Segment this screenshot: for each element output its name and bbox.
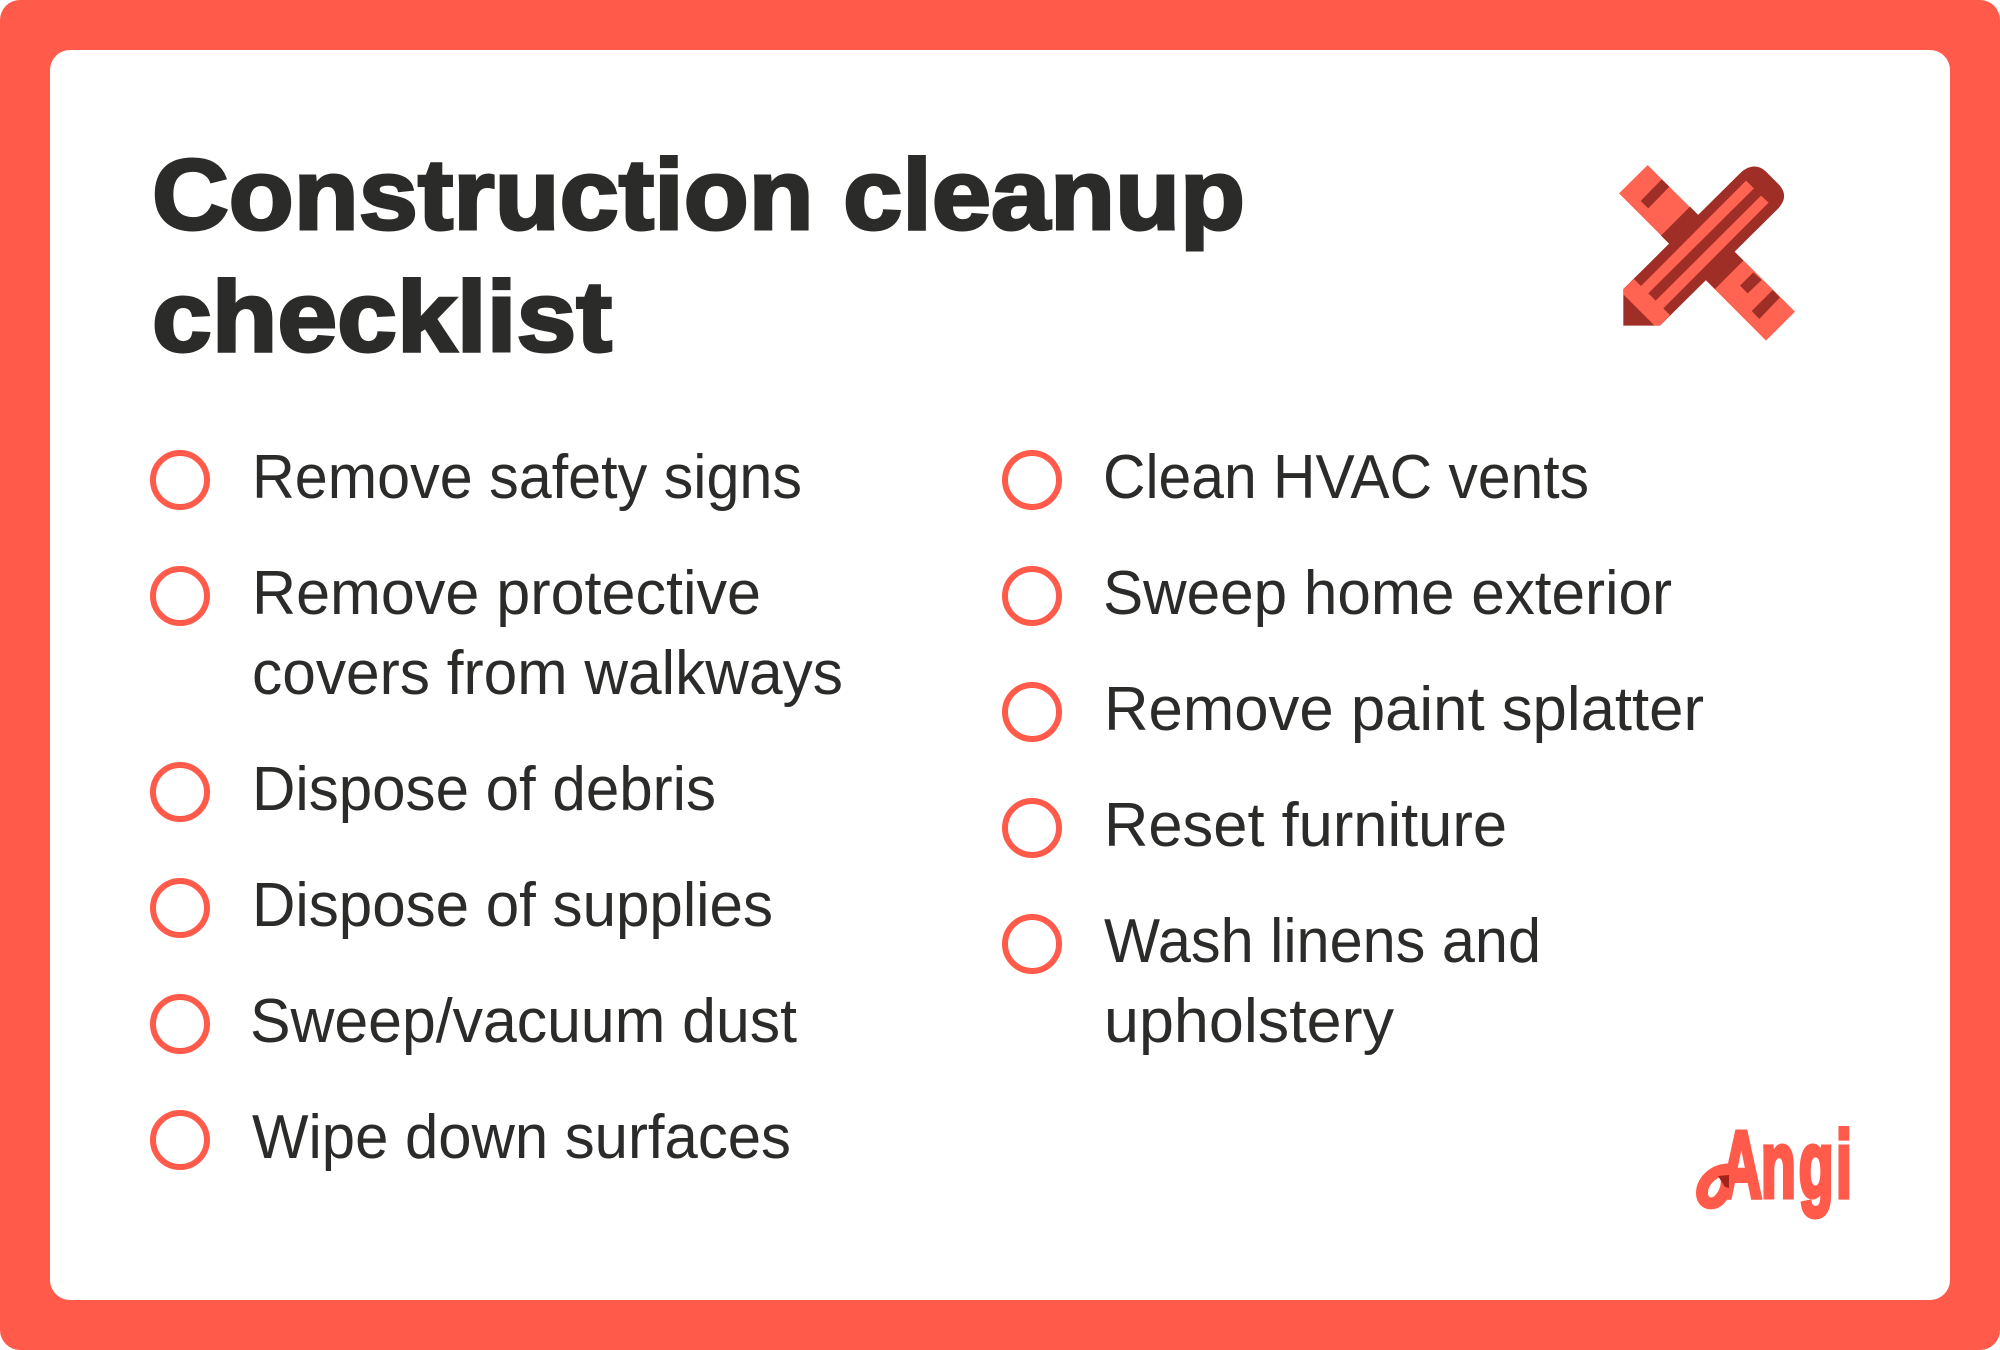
item: Sweep/vacuum dust: Sweep/vacuum dust (250, 987, 797, 1056)
checklist left column (153, 443, 843, 1172)
item: Clean HVAC vents: Clean HVAC vents (1103, 443, 1589, 512)
item: Remove safety signs: Remove safety signs (252, 443, 802, 512)
checklist right column (1005, 443, 1704, 1056)
item: Remove protective covers from walkways (153, 559, 843, 708)
logo: Angi: Angi (1721, 1111, 1852, 1218)
item: Sweep home exterior: Sweep home exterior (1103, 559, 1672, 628)
item: Remove protective covers from walkways: covers from walkways (252, 639, 843, 708)
item: Remove protective covers from walkways: Remove protective (252, 559, 761, 628)
title: checklist (152, 261, 612, 373)
item: Wash linens and upholstery: Wash linens and (1104, 907, 1541, 976)
item: Remove paint splatter: Remove paint splatter (1104, 675, 1704, 744)
title: Construction cleanup (152, 139, 1245, 251)
item: Wash linens and upholstery: upholstery (1104, 987, 1394, 1056)
title (152, 139, 1245, 373)
item: Dispose of debris: Dispose of debris (252, 755, 716, 824)
item: Dispose of supplies: Dispose of supplies (252, 871, 773, 940)
icon: crossed pencil and ruler (1619, 165, 1795, 341)
item: Wipe down surfaces: Wipe down surfaces (252, 1103, 791, 1172)
item: Wash linens and upholstery (1005, 907, 1541, 1056)
item: Reset furniture: Reset furniture (1104, 791, 1507, 860)
